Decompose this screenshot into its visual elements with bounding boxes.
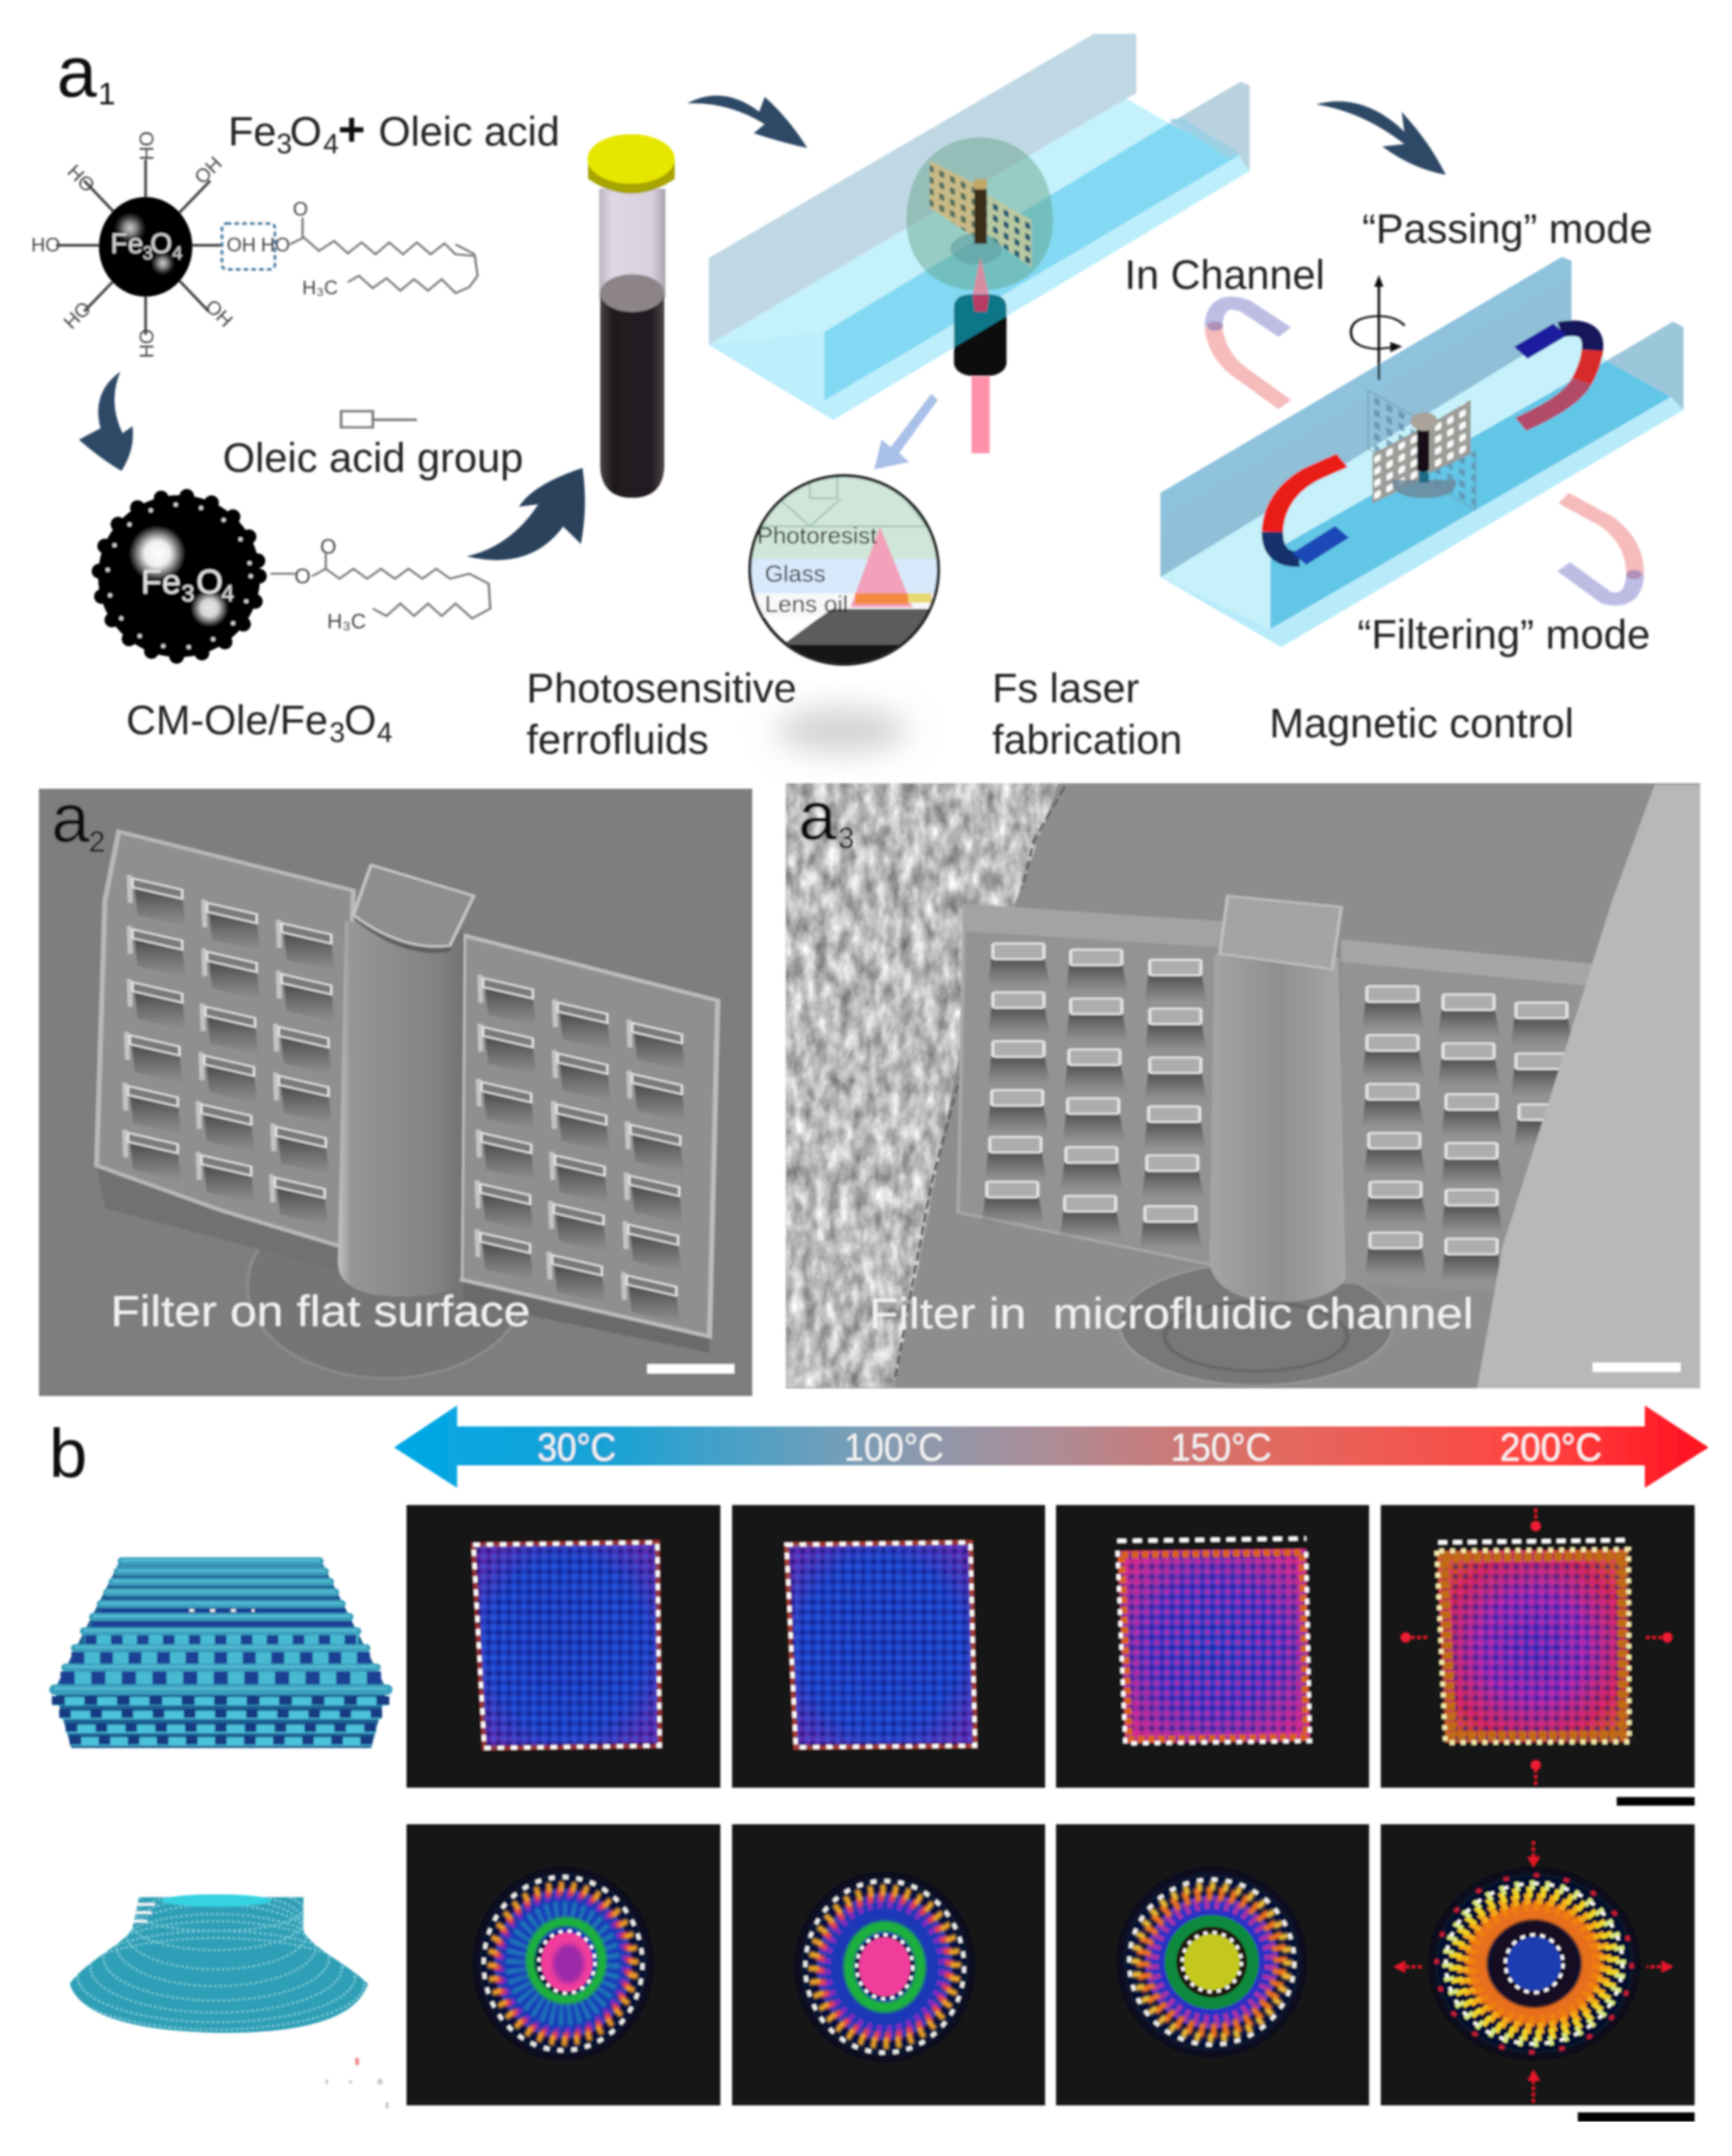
inset ring bbox=[750, 476, 938, 664]
dashed outer outline bbox=[484, 1877, 642, 2050]
yellow cap top bbox=[587, 134, 674, 184]
wall overlap band bbox=[1169, 119, 1239, 159]
base disc bbox=[950, 234, 1002, 265]
lattice colours bbox=[1437, 1549, 1629, 1743]
highlight bbox=[114, 213, 146, 244]
dashed outer outline bbox=[1129, 1880, 1294, 2045]
label: magnetic control: Magnetic control bbox=[1269, 701, 1574, 747]
grafted chain bbox=[270, 554, 491, 618]
right wing pores bbox=[1362, 987, 1576, 1282]
front wall over floor bbox=[824, 123, 1239, 401]
icon: test tube of ferrofluid bbox=[587, 134, 674, 498]
left shadow bbox=[97, 1166, 343, 1271]
scale bar row 1 bbox=[1617, 1797, 1695, 1806]
rotated filter grid right bbox=[1427, 399, 1471, 473]
SEM background bbox=[786, 783, 1700, 1388]
core centre bbox=[553, 1944, 584, 1983]
inset: lens stack cross-section bbox=[748, 472, 942, 677]
channel back wall bbox=[709, 33, 1136, 345]
hydroxyl labels: HO bbox=[136, 131, 158, 160]
outer floor strip bbox=[1160, 397, 1684, 647]
column cap shadow bbox=[354, 909, 458, 953]
molecule: hydroxylated Fe3O4 nanoparticle bbox=[31, 131, 477, 358]
dashed inner outline bbox=[1505, 1935, 1563, 1992]
back wall bbox=[1160, 257, 1572, 577]
meniscus bbox=[600, 274, 664, 312]
hydroxyl labels: HO bbox=[59, 297, 96, 333]
purple rays bbox=[1149, 1900, 1274, 2024]
front magnet red limb bbox=[1273, 460, 1342, 532]
surface dots bbox=[107, 505, 251, 648]
heading: Fe3O4 plus oleic acid: Fe bbox=[228, 109, 276, 155]
highlight small bbox=[191, 589, 228, 627]
lattice body bbox=[55, 1557, 387, 1748]
outer floor strip bbox=[709, 156, 1250, 420]
red shrink arrows bbox=[1411, 1509, 1662, 1785]
dashed inner outline bbox=[857, 1935, 913, 1999]
orange border band bbox=[1121, 1553, 1306, 1739]
rotation loop bbox=[1351, 316, 1405, 349]
arrow: to laser fabrication bbox=[688, 96, 808, 148]
lattice dots bbox=[473, 1542, 660, 1748]
SEM background bbox=[39, 789, 752, 1396]
hydroxyl labels: HO bbox=[63, 160, 99, 197]
image tile: square 150 C bbox=[1056, 1505, 1369, 1788]
left wing pores bbox=[125, 875, 335, 1226]
panel label a1: a bbox=[57, 33, 97, 112]
faded magnet bottom-right pink limb bbox=[1564, 498, 1635, 575]
faded magnet top-left joint bbox=[1207, 322, 1223, 331]
panel: a2 SEM filter on flat surface bbox=[39, 779, 752, 1396]
label: filtering mode: “Filtering” mode bbox=[1357, 612, 1650, 658]
label: Fs laser fabrication: Fs laser bbox=[992, 666, 1139, 712]
amber rays bbox=[1459, 1896, 1609, 2031]
objective body bbox=[954, 294, 1006, 376]
lattice colours bbox=[787, 1542, 975, 1747]
focused beam bbox=[973, 257, 989, 296]
particle formula: 4 bbox=[221, 581, 234, 607]
glass layer bbox=[748, 559, 942, 593]
dark background bbox=[732, 1505, 1045, 1788]
methyl label: H₃C bbox=[327, 610, 366, 633]
hydroxyl labels: HO bbox=[261, 234, 290, 256]
ring stack bbox=[484, 1877, 642, 2050]
rear magnet blue limb bbox=[1521, 329, 1560, 353]
pink core bbox=[541, 1933, 593, 1992]
double-headed arrow bbox=[394, 1405, 1709, 1488]
dashed inner outline bbox=[539, 1931, 595, 1993]
dark background bbox=[1056, 1505, 1369, 1788]
arrow: to lens inset bbox=[875, 394, 938, 470]
blue ring bbox=[836, 1914, 934, 2020]
ring stack bbox=[805, 1881, 964, 2052]
model: conical lens bbox=[68, 1887, 368, 2033]
heading: Fe3O4 plus oleic acid: Oleic acid bbox=[378, 109, 560, 155]
horizontal bars bbox=[55, 1561, 387, 1690]
front magnet dark bend bbox=[1273, 532, 1299, 559]
dashed reaction box bbox=[222, 223, 275, 269]
oleic acid chain bbox=[290, 217, 477, 293]
hydroxyl spokes bbox=[56, 160, 222, 335]
left lattice wing bbox=[97, 832, 354, 1247]
ring stack bbox=[1125, 1875, 1299, 2049]
100 C label: 100°C bbox=[844, 1426, 944, 1469]
pale ray tips bbox=[1437, 1876, 1632, 2052]
back wall top rim bbox=[1160, 257, 1572, 522]
green ring bbox=[849, 1926, 921, 2007]
rotated filter grid left bbox=[1372, 429, 1419, 503]
inner floor bbox=[1160, 325, 1607, 629]
label: photosensitive ferrofluids: Photosensitive bbox=[526, 666, 797, 712]
heading: Fe3O4 plus oleic acid: 3 bbox=[276, 128, 292, 160]
hydroxyl labels: OH bbox=[227, 234, 255, 256]
yellow rays bbox=[1125, 1875, 1299, 2049]
oxygen label: O bbox=[293, 199, 308, 220]
upper dark rows bbox=[92, 1567, 352, 1624]
front magnet bbox=[1273, 460, 1342, 559]
temperature gradient arrow bbox=[394, 1405, 1709, 1488]
yellow rays bbox=[1449, 1886, 1620, 2042]
right lattice wing bbox=[461, 935, 718, 1337]
central column bbox=[338, 921, 464, 1296]
column cap bbox=[1410, 412, 1438, 431]
lattice dots bbox=[1118, 1549, 1310, 1743]
left lattice wing bbox=[958, 905, 1223, 1265]
blue core bbox=[1507, 1936, 1561, 1991]
dark background bbox=[1056, 1824, 1369, 2105]
panel: a3 SEM filter in microfluidic channel bbox=[786, 777, 1700, 1388]
printed filter left bbox=[930, 160, 976, 238]
dashed reference line bbox=[1438, 1540, 1625, 1542]
blue ring bbox=[1159, 1909, 1265, 2015]
printed filter right bbox=[984, 192, 1032, 267]
ghost filter bbox=[1368, 390, 1475, 510]
dark background bbox=[1381, 1824, 1695, 2105]
arrow: to magnetic control bbox=[1316, 101, 1445, 175]
purple rays bbox=[822, 1899, 947, 2035]
rough channel wall bbox=[786, 783, 1058, 1388]
label: CM-Ole/Fe3O4: 4 bbox=[377, 716, 393, 748]
SEM structure bbox=[97, 832, 718, 1378]
dark background bbox=[732, 1824, 1045, 2105]
resist layer bbox=[748, 472, 942, 559]
inset layers bbox=[749, 475, 939, 664]
dashed inner outline bbox=[1182, 1933, 1241, 1992]
axis arrowhead bbox=[1375, 275, 1384, 287]
diagram: laser fabrication channel bbox=[709, 33, 1250, 453]
right wing top rail bbox=[1341, 940, 1594, 987]
hydroxyl labels bbox=[31, 131, 290, 358]
label: CM-Ole/Fe3O4: CM-Ole/Fe bbox=[126, 698, 328, 744]
teal rays bbox=[517, 1914, 609, 2014]
panel label a3: a bbox=[798, 777, 836, 854]
label: CM-Ole/Fe3O4: O bbox=[344, 698, 376, 744]
channel crack bbox=[894, 786, 1065, 1381]
faded magnet top-left purple limb bbox=[1213, 303, 1285, 332]
particle formula: 4 bbox=[172, 243, 182, 264]
base disc bbox=[1119, 1263, 1393, 1385]
column cap bbox=[354, 865, 473, 947]
neck steps bbox=[129, 1905, 155, 1921]
middle rows struts bbox=[61, 1641, 382, 1678]
particle formula: O bbox=[150, 227, 172, 259]
lower rows base bbox=[53, 1701, 388, 1742]
panel label a2: a bbox=[51, 779, 90, 856]
right lattice wing bbox=[1341, 940, 1594, 1292]
oil layer bbox=[748, 593, 942, 617]
stray marks bbox=[326, 2058, 389, 2109]
label: photosensitive ferrofluids: ferrofluids bbox=[526, 717, 709, 763]
hydroxyl labels: HO bbox=[31, 234, 61, 256]
dashed outline bbox=[473, 1542, 660, 1748]
nanoparticle sphere bbox=[99, 197, 192, 297]
right wing pores bbox=[477, 975, 685, 1324]
inset text: photoresist: Photoresist bbox=[757, 523, 878, 549]
particle formula: Fe bbox=[141, 563, 181, 601]
front wall over floor bbox=[1270, 361, 1671, 629]
carbonyl oxygen: O bbox=[320, 535, 336, 558]
rotation loop arrowhead bbox=[1390, 342, 1402, 353]
dark background bbox=[407, 1505, 720, 1788]
arrow: down to coated particle bbox=[79, 371, 133, 471]
middle rows base bbox=[64, 1641, 379, 1678]
orange rays bbox=[484, 1877, 642, 2050]
image tile: lens 100 C bbox=[732, 1824, 1045, 2105]
panel: a1 synthesis and fabrication schematic bbox=[31, 33, 1684, 763]
lower rows struts bbox=[52, 1701, 389, 1740]
filter column bbox=[1417, 425, 1429, 472]
left wing pores bbox=[982, 944, 1207, 1249]
dark halo bbox=[1491, 1920, 1578, 2007]
SEM structure bbox=[786, 783, 1700, 1388]
orange rays bbox=[1470, 1906, 1598, 2021]
column stem bbox=[1419, 472, 1429, 483]
scale bar row 2 bbox=[1578, 2112, 1695, 2122]
30 C label: 30°C bbox=[537, 1426, 616, 1469]
green ring bbox=[1171, 1921, 1253, 2003]
central column bbox=[1209, 954, 1346, 1302]
focus dome bbox=[906, 138, 1053, 290]
image tile: square 200 C bbox=[1381, 1505, 1695, 1788]
label: Fs laser fabrication: fabrication bbox=[992, 717, 1182, 763]
faded magnet bottom-right purple limb bbox=[1564, 567, 1635, 599]
filter column bbox=[974, 181, 987, 244]
legend: oleic acid group bbox=[223, 411, 523, 481]
label: passing mode: “Passing” mode bbox=[1362, 206, 1653, 252]
caption: Filter in microfluidic channel bbox=[869, 1289, 1473, 1338]
red arrow dots bbox=[1401, 1521, 1672, 1770]
bar highlights bbox=[55, 1560, 387, 1689]
faded magnet bottom-right joint bbox=[1626, 570, 1642, 579]
left wing top rail bbox=[964, 905, 1223, 948]
model: woodpile lattice bbox=[52, 1557, 389, 1748]
column cap bbox=[1220, 896, 1341, 969]
rear magnet lower limb bbox=[1521, 382, 1582, 424]
legend glyph bbox=[341, 411, 417, 427]
navy halo bbox=[801, 1878, 969, 2056]
right shadow bbox=[464, 1279, 709, 1352]
incoming beam bbox=[971, 377, 990, 453]
red outer dots bbox=[1437, 1875, 1632, 2052]
oxygen labels: O bbox=[294, 564, 311, 588]
diagram: magnetic control channel bbox=[1160, 257, 1684, 647]
laser cone bbox=[850, 526, 913, 607]
lattice dots bbox=[1437, 1549, 1629, 1743]
front wall end bbox=[1169, 82, 1250, 171]
inset text: glass: Glass bbox=[765, 561, 826, 587]
caption: Filter on flat surface bbox=[111, 1286, 530, 1335]
hydroxyl labels: HO bbox=[136, 329, 158, 358]
dashed outline bbox=[787, 1542, 975, 1747]
purple rays bbox=[498, 1892, 628, 2035]
objective body bbox=[786, 607, 930, 646]
blue ring bbox=[514, 1911, 612, 2017]
yellow cap side bbox=[588, 159, 674, 194]
image tile: lens 30 C bbox=[407, 1824, 720, 2105]
navy halo bbox=[1123, 1873, 1301, 2051]
red rays bbox=[491, 1885, 635, 2042]
dashed side outline bbox=[1118, 1549, 1310, 1743]
rear magnet bbox=[1521, 329, 1593, 424]
label: CM-Ole/Fe3O4: 3 bbox=[329, 716, 345, 748]
image tile: lens 150 C bbox=[1056, 1824, 1369, 2105]
pale gap marks bbox=[189, 1606, 255, 1615]
orange ring bbox=[1477, 1912, 1591, 2016]
green ring bbox=[530, 1922, 602, 1999]
objective teal window bbox=[954, 294, 1006, 347]
hydroxyl labels: OH bbox=[190, 153, 227, 188]
panel: b thermal shrinkage bbox=[49, 1405, 1709, 2122]
highlight small bbox=[151, 251, 174, 275]
image tile: lens 200 C bbox=[1381, 1824, 1695, 2105]
rear magnet dark bend bbox=[1560, 329, 1593, 350]
objective base bbox=[790, 644, 899, 664]
image tile: square 30 C bbox=[407, 1505, 720, 1788]
lattice dots bbox=[787, 1542, 975, 1747]
cone body bbox=[70, 1897, 368, 2033]
yellow core bbox=[1184, 1934, 1240, 1990]
molecule: CM-Ole/Fe3O4 coated particle bbox=[98, 495, 491, 657]
red shrink arrows bbox=[1394, 1841, 1673, 2102]
faded magnet top-left pink limb bbox=[1213, 327, 1285, 405]
coated sphere bbox=[98, 495, 260, 657]
pink core bbox=[859, 1937, 910, 1996]
150 C label: 150°C bbox=[1171, 1426, 1272, 1469]
plus sign: + bbox=[338, 104, 365, 156]
particle formula: O bbox=[196, 563, 223, 601]
shadow below inset bbox=[776, 709, 908, 752]
heading: Fe3O4 plus oleic acid: O bbox=[290, 109, 322, 155]
ring stack bbox=[1437, 1875, 1632, 2052]
front magnet blue limb bbox=[1299, 532, 1342, 559]
panel label a1: 1 bbox=[98, 77, 115, 111]
column top bbox=[974, 179, 987, 189]
smooth channel wall bbox=[1477, 785, 1700, 1388]
inset text: lens oil: Lens oil bbox=[765, 592, 848, 617]
panel label a3: 3 bbox=[838, 822, 854, 855]
particle formula: 3 bbox=[143, 243, 153, 264]
yellow band bbox=[908, 593, 931, 603]
orange border band bbox=[1443, 1556, 1623, 1736]
lattice colours bbox=[473, 1542, 660, 1748]
dark core halo bbox=[1174, 1925, 1249, 1999]
rear magnet red bend bbox=[1582, 350, 1593, 382]
image tile: square 100 C bbox=[732, 1505, 1045, 1788]
surface bumps bbox=[99, 496, 259, 656]
panel label a2: 2 bbox=[89, 826, 105, 859]
orange rays bbox=[805, 1881, 964, 2052]
200 C label: 200°C bbox=[1500, 1426, 1602, 1469]
navy halo bbox=[479, 1873, 647, 2054]
filter base disc bbox=[1392, 480, 1456, 498]
inner floor bbox=[709, 99, 1169, 345]
orange exposure band bbox=[855, 593, 908, 604]
resist detail lines bbox=[752, 475, 938, 526]
base disc bbox=[248, 1193, 526, 1378]
dark background bbox=[1381, 1505, 1695, 1788]
lattice colours bbox=[1118, 1549, 1310, 1743]
glass tube bbox=[599, 188, 665, 298]
arrow: to test tube bbox=[466, 468, 585, 560]
cone top bbox=[161, 1894, 271, 1907]
label: in channel: In Channel bbox=[1125, 252, 1325, 298]
red rays bbox=[815, 1890, 955, 2043]
orange rays bbox=[1136, 1887, 1287, 2038]
disc ring bbox=[1165, 1302, 1347, 1371]
dashed reference line bbox=[1118, 1539, 1306, 1541]
cone texture bbox=[68, 1887, 364, 2029]
dashed outer outline bbox=[805, 1881, 964, 2052]
panel label b: b bbox=[49, 1415, 87, 1492]
particle formula: Fe bbox=[111, 227, 143, 259]
legend text: Oleic acid group bbox=[223, 435, 523, 481]
beam in objective bbox=[973, 295, 989, 311]
front wall end bbox=[1607, 322, 1684, 410]
dark background bbox=[407, 1824, 720, 2105]
dashed side outline bbox=[1437, 1549, 1629, 1743]
rotation axis arrow bbox=[1376, 283, 1382, 380]
navy halo bbox=[1435, 1873, 1634, 2054]
scale bar bbox=[647, 1364, 734, 1373]
hydroxyl labels: OH bbox=[201, 295, 237, 332]
dashed outer outline bbox=[1446, 1883, 1622, 2044]
scale bar bbox=[1593, 1363, 1681, 1372]
ferrofluid bbox=[600, 293, 664, 498]
particle formula: 3 bbox=[181, 581, 195, 607]
heading: Fe3O4 plus oleic acid: 4 bbox=[323, 128, 339, 160]
highlight bbox=[129, 526, 185, 582]
methyl label: H₃C bbox=[302, 277, 338, 299]
